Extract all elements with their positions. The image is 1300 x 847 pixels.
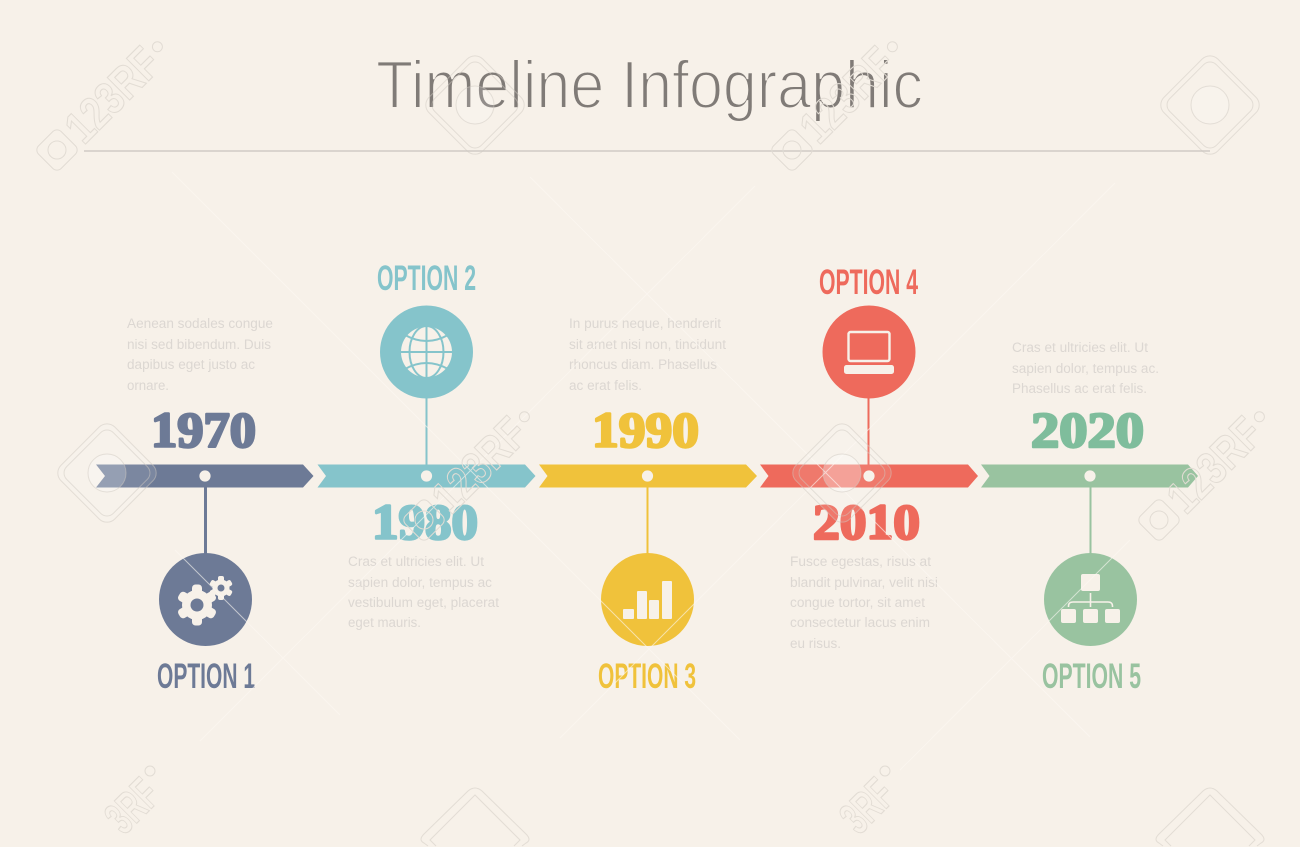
title: Timeline Infographic [376, 47, 923, 123]
body text 1970: dapibus eget justo ac [127, 357, 255, 372]
icon: org chart [1044, 553, 1137, 646]
body text 1970: ornare. [127, 378, 169, 393]
body text 2010: Fusce egestas, risus at [790, 554, 931, 569]
watermark logos: 123RF [789, 37, 905, 153]
watermark logos: 123RF [421, 407, 537, 523]
label option 1: OPTION 1 [157, 657, 255, 696]
body text 2020: sapien dolor, tempus ac. [1012, 361, 1159, 376]
panel: 1990 option 3 [539, 316, 757, 696]
body text 1990: In purus neque, hendrerit [569, 316, 721, 331]
icon: gears [159, 553, 252, 646]
watermark logos: 3RF [94, 768, 169, 843]
year 2020: 2020 [1031, 402, 1144, 458]
year 1990: 1990 [592, 402, 699, 458]
icon: bar chart [601, 553, 694, 646]
watermark logos: 3RF [829, 768, 904, 843]
arrow segment 1 [96, 464, 314, 488]
body text 2020: Phasellus ac erat felis. [1012, 381, 1147, 396]
body text 1990: ac erat felis. [569, 378, 642, 393]
arrow segment 4 [760, 464, 978, 488]
label option 2: OPTION 2 [377, 259, 476, 298]
body text 2010: consectetur lacus enim [790, 615, 930, 630]
body text 1980 [348, 554, 499, 630]
label option 3: OPTION 3 [598, 657, 696, 696]
body text 1980: sapien dolor, tempus ac [348, 575, 492, 590]
body text 2010: congue tortor, sit amet [790, 595, 925, 610]
panel: 1980 option 2 [318, 259, 536, 630]
body text 1980: eget mauris. [348, 615, 421, 630]
label option 5: OPTION 5 [1042, 657, 1141, 696]
arrow segment 5 [981, 464, 1198, 488]
icon: globe [380, 306, 473, 398]
body text 1970: nisi sed bibendum. Duis [127, 337, 271, 352]
watermark logos: 123RF [54, 37, 170, 153]
watermark logos: 123RF [1156, 407, 1272, 523]
label option 4: OPTION 4 [819, 263, 918, 302]
body text 1990: rhoncus diam. Phasellus [569, 357, 717, 372]
body text 2010: eu risus. [790, 636, 841, 651]
body text 1970 [127, 316, 273, 393]
year 1980: 1980 [372, 494, 478, 550]
body text 2010: blandit pulvinar, velit nisi [790, 575, 938, 590]
body text 1990 [569, 316, 726, 393]
year 2010: 2010 [813, 494, 920, 550]
arrow segment 2 [318, 464, 536, 488]
arrow segment 3 [539, 464, 757, 488]
panel: 1970 option 1 [96, 316, 314, 696]
body text 1980: Cras et ultricies elit. Ut [348, 554, 484, 569]
icon: laptop [822, 306, 916, 398]
body text 1980: vestibulum eget, placerat [348, 595, 499, 610]
year 1970: 1970 [151, 402, 256, 458]
body text 1970: Aenean sodales congue [127, 316, 273, 331]
body text 2020: Cras et ultricies elit. Ut [1012, 340, 1148, 355]
body text 2020 [1012, 340, 1159, 396]
body text 2010 [790, 554, 938, 651]
panel: 2010 option 4 [760, 263, 978, 651]
body text 1990: sit amet nisi non, tincidunt [569, 337, 726, 352]
panel: 2020 option 5 [981, 340, 1198, 696]
